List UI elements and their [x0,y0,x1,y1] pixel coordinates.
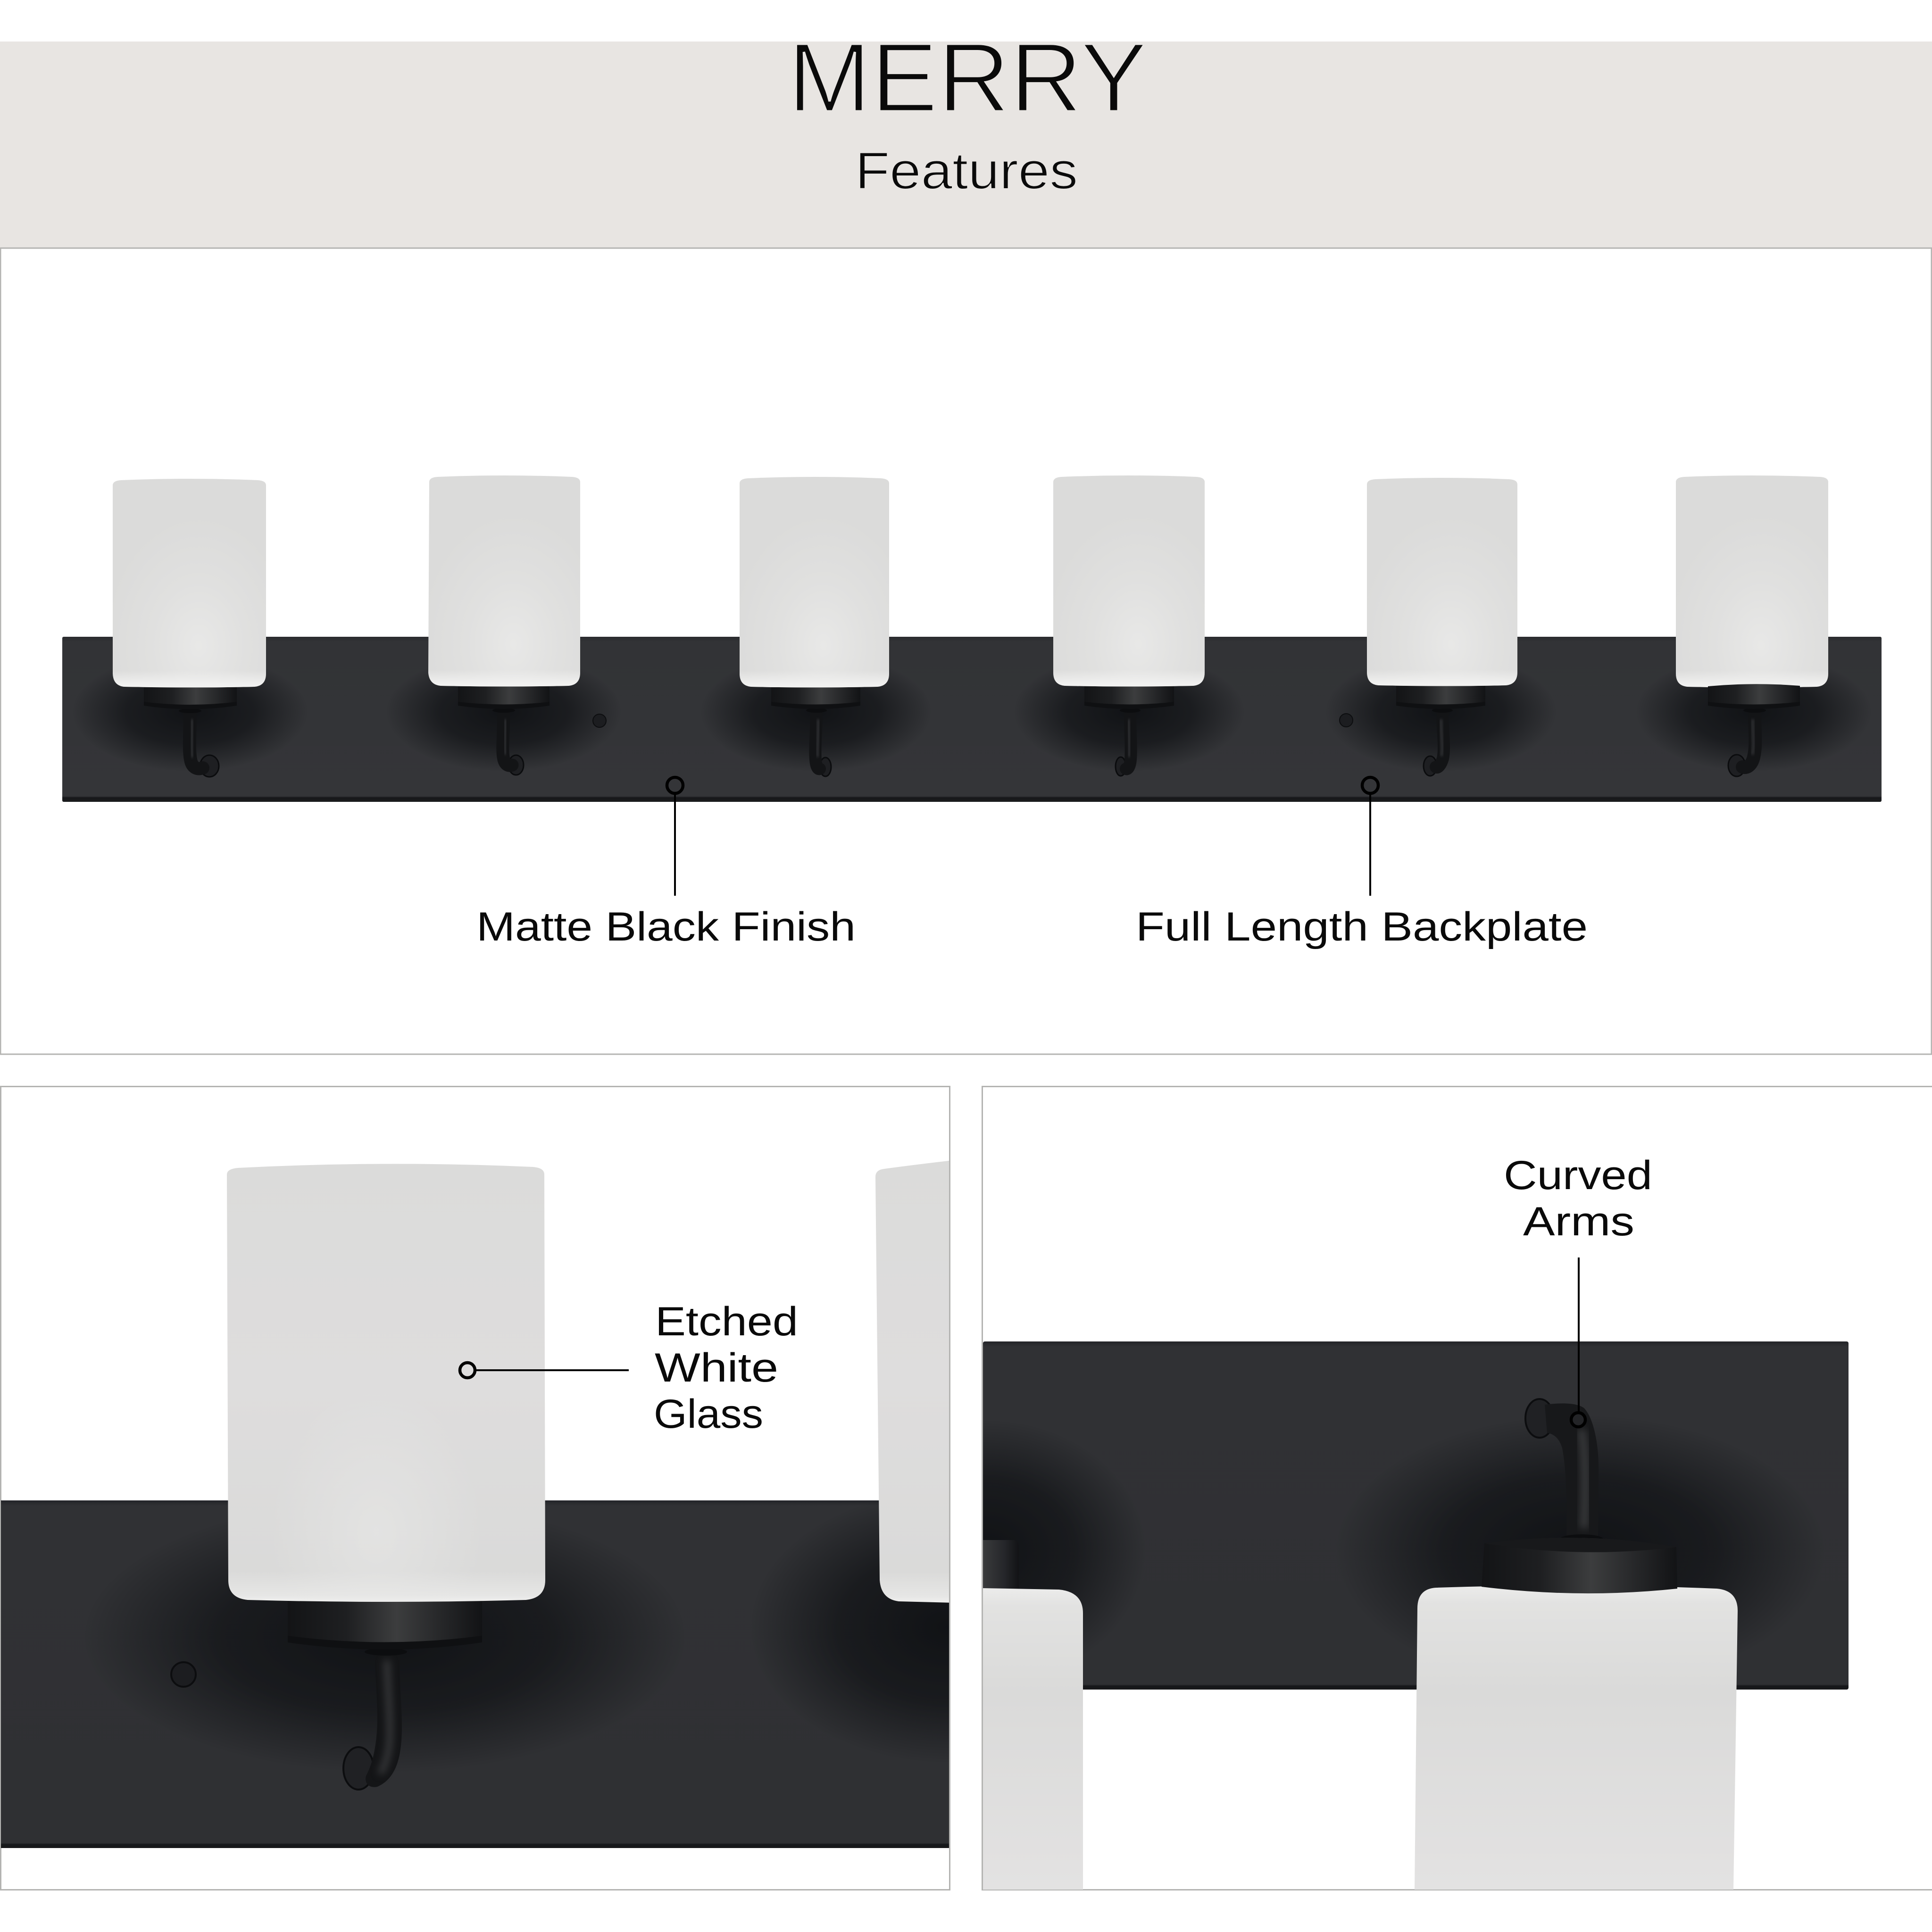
callout: etched white glass: Glass [654,1391,763,1437]
callout: curved arms: Arms [1523,1199,1634,1244]
neighbouring cup [983,1540,1019,1590]
screw cap [1424,756,1437,776]
callout: etched white glass [460,1299,798,1437]
curved arm [1436,712,1444,767]
lamp shadows [90,679,1854,762]
callout: curved arms [1504,1153,1652,1427]
lamp 6 [1676,475,1828,776]
mounting screw [171,1662,196,1687]
cup [1084,684,1174,708]
callout: matte black finish: Matte Black Finish [476,904,856,949]
curved arm [815,712,820,769]
glass shade [1367,478,1517,686]
lamp 1 [113,479,266,777]
neighbouring glass shade [875,1160,953,1603]
lamp 5 [1367,478,1517,776]
mounting screw right [1340,714,1353,727]
title: MERRY [788,23,1147,133]
close-up shadows [134,1524,949,1751]
callout: etched white glass: Etched [655,1299,798,1344]
screw cap [343,1747,374,1790]
screw cap [1525,1399,1554,1438]
lamp 2 [428,475,580,775]
cup [288,1593,482,1649]
screw cap [508,755,524,775]
subtitle: Features [855,142,1078,200]
curved arm [1545,1403,1603,1544]
neighbouring glass shade [983,1588,1083,1890]
screw cap [820,758,831,776]
screw cap [200,755,219,777]
screw cap [1116,757,1126,776]
panel: full fixture [0,248,1932,1054]
glass shade [1415,1585,1738,1890]
lamp 3 [740,477,889,776]
curved arm [190,712,203,768]
callout: full length backplate [1136,777,1588,949]
glass shade [1053,475,1205,687]
cup [771,684,860,708]
panel: etched white glass detail [0,1086,950,1890]
curved arm [503,712,512,766]
curved arm [1742,712,1755,767]
header band [0,23,1932,248]
curved arm [365,1648,407,1787]
glass shade [428,475,580,687]
close-up shadows [983,1439,1784,1627]
glass shade [1676,475,1828,688]
cup [144,684,237,709]
panel: curved arms detail [982,1086,1932,1890]
backplate close-up [983,1341,1849,1690]
mounting screw left [593,714,606,727]
cup [1708,684,1800,708]
callout: etched white glass: White [655,1345,778,1391]
lamp 4 [1053,475,1205,776]
callout: matte black finish [476,777,856,949]
glass shade [227,1164,545,1602]
curved arm [1126,712,1131,769]
backplate [62,637,1882,802]
screw cap [1728,755,1745,776]
callout: curved arms: Curved [1504,1153,1652,1198]
glass shade [113,479,266,688]
glass shade [740,477,889,688]
cup [1396,684,1485,708]
backplate close-up [1,1500,949,1848]
callout: full length backplate: Full Length Backplate [1136,904,1588,949]
cup [1482,1538,1677,1593]
cup [458,684,550,708]
